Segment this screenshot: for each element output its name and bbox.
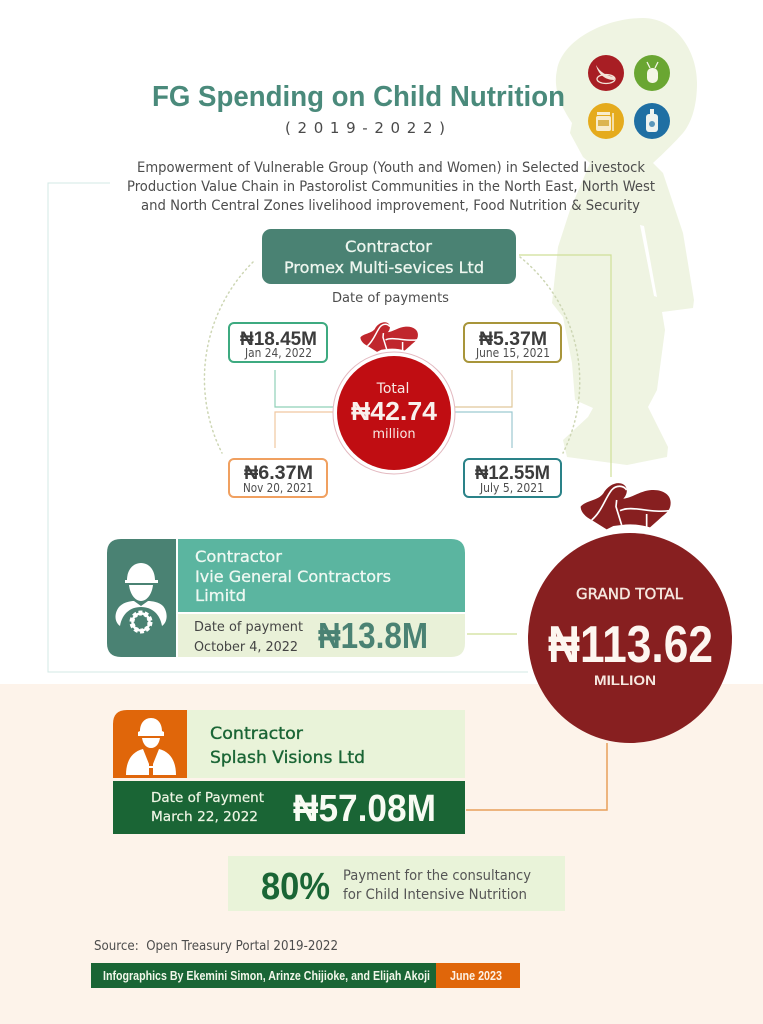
grand total circle: GRAND TOTAL [576, 585, 684, 603]
payment: N6.37M [229, 459, 327, 497]
child silhouette [552, 18, 697, 465]
credits bar: June 2023 [450, 968, 502, 983]
payment: N12.55M: July 5, 2021 [479, 481, 544, 495]
project description: Production Value Chain in Pastorolist Communities in the North East, North West [127, 179, 655, 195]
icon: baby bowl on red circle [588, 55, 624, 91]
panel: Splash Visions: Date of Payment [151, 790, 264, 806]
grand total circle [528, 533, 732, 743]
icon: bib on green circle [634, 55, 670, 91]
credits bar [91, 963, 520, 988]
credits bar: Infographics By Ekemini Simon, Arinze Chijioke, and Elijah Akoji [103, 968, 430, 983]
title: FG Spending on Child Nutrition [152, 81, 565, 113]
payment: N6.37M: ₦6.37M [244, 463, 313, 484]
panel: Promex contractor: Promex Multi-sevices Ltd [284, 258, 484, 277]
payment: N12.55M: ₦12.55M [475, 463, 550, 484]
connector: Splash to grand total [466, 743, 607, 810]
total circle: N42.74 million: ₦42.74 [351, 396, 438, 426]
connector: Promex to grand total [519, 255, 611, 477]
icon: engineer with gear [116, 563, 167, 631]
payment: N18.45M: Jan 24, 2022 [244, 346, 312, 360]
panel: Splash Visions: Splash Visions Ltd [210, 748, 365, 768]
payment: N18.45M: ₦18.45M [240, 329, 317, 350]
panel: Splash Visions: ₦57.08M [293, 788, 436, 830]
connector: outer frame line [48, 183, 528, 672]
source note: Source: Open Treasury Portal 2019-2022 [94, 939, 338, 954]
total circle: N42.74 million: Total [376, 381, 409, 397]
payment: N5.37M: ₦5.37M [479, 329, 547, 350]
panel: Promex contractor: Contractor [345, 237, 432, 256]
icon: food jar on yellow circle [588, 103, 624, 139]
total circle: N42.74 million: million [372, 427, 416, 442]
payment: N12.55M [464, 459, 561, 497]
subtitle years: ( 2 0 1 9 - 2 0 2 2 ) [285, 119, 445, 137]
icon group: nutrition icons [588, 55, 670, 139]
panel: Ivie General Contractors: Ivie General Contractors [195, 567, 391, 586]
project description: Empowerment of Vulnerable Group (Youth and Women) in Selected Livestock [137, 160, 646, 176]
project description [127, 160, 655, 214]
panel: Ivie General Contractors: Limitd [195, 586, 246, 605]
payment connector lines [275, 370, 512, 448]
panel: Ivie General Contractors: October 4, 2022 [194, 639, 298, 655]
panel: Ivie General Contractors: Date of payment [194, 619, 303, 635]
peach background band [0, 684, 763, 1024]
payment: N6.37M: Nov 20, 2021 [243, 481, 313, 495]
panel: Ivie General Contractors: ₦13.8M [318, 615, 428, 656]
total circle: N42.74 million [333, 352, 455, 474]
grand total circle: ₦113.62 [548, 616, 713, 674]
callout: 80% consultancy [228, 856, 565, 911]
payment: N5.37M [464, 323, 561, 362]
icon: small sack tie [360, 322, 418, 352]
icon: grand total sack tie [581, 483, 671, 529]
payment: N18.45M [229, 323, 327, 362]
panel: Splash Visions: Contractor [210, 724, 303, 744]
dotted arc around Promex payments [204, 257, 580, 453]
icon: feeding bottle on blue circle [634, 103, 670, 139]
project description: and North Central Zones livelihood improvement, Food Nutrition & Security [141, 198, 640, 214]
callout: 80% consultancy: Payment for the consultancy [343, 868, 531, 884]
panel: Ivie General Contractors: Contractor [195, 547, 282, 566]
panel: Promex contractor [262, 229, 516, 284]
icon: worker in vest [126, 718, 176, 775]
panel: Splash Visions [113, 710, 465, 834]
grand total circle: MILLION [594, 672, 656, 688]
label: date of payments: Date of payments [332, 290, 449, 306]
callout: 80% consultancy: 80% [261, 866, 330, 908]
panel: Splash Visions: March 22, 2022 [151, 809, 258, 825]
panel: Ivie General Contractors [107, 539, 465, 657]
callout: 80% consultancy: for Child Intensive Nutrition [343, 887, 527, 903]
connector: Ivie to grand total [467, 633, 517, 635]
payment: N5.37M: June 15, 2021 [475, 346, 550, 360]
